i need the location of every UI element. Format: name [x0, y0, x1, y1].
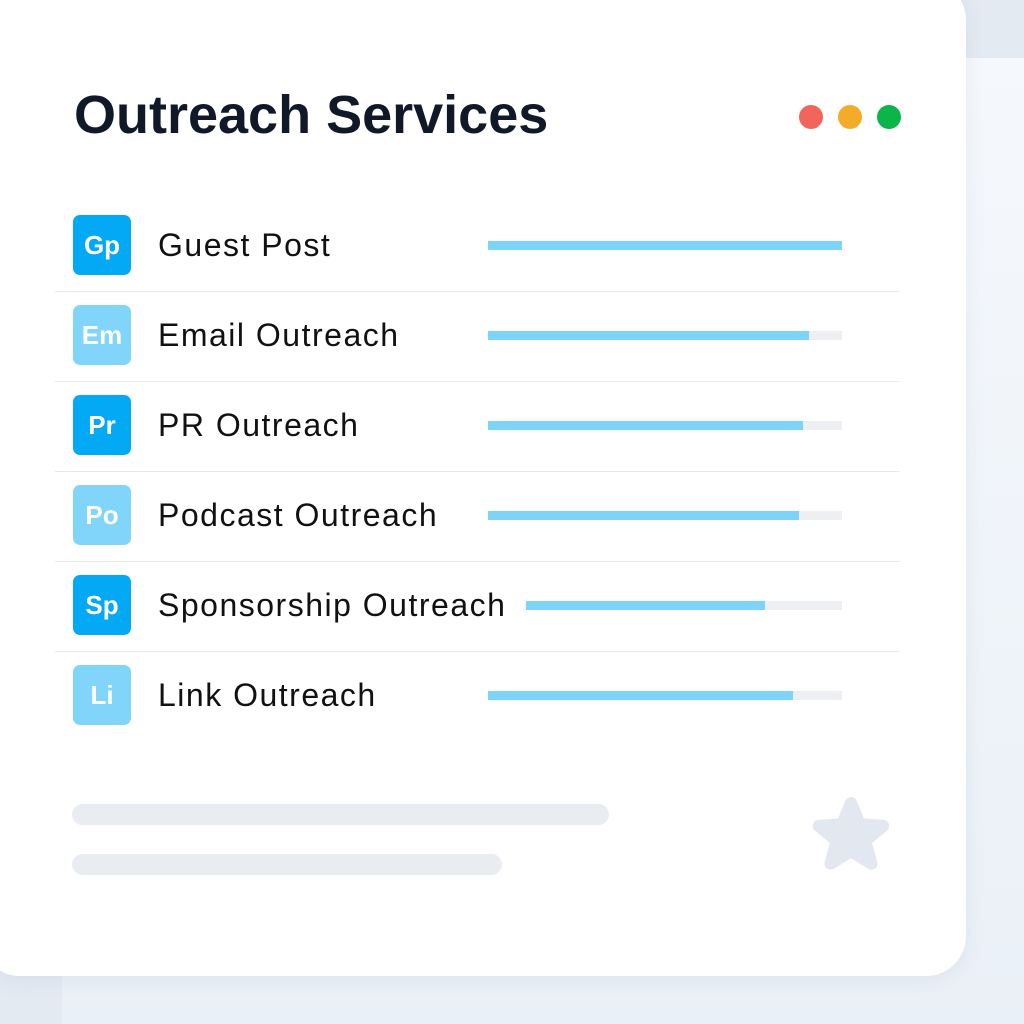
row: Sponsorship Outreach [55, 575, 900, 652]
row: Guest Post: Gp [84, 230, 120, 260]
placeholder bar 2 [72, 854, 502, 875]
row: PR Outreach [55, 395, 900, 472]
row: Link Outreach [73, 665, 842, 725]
row: Email Outreach: Em [82, 320, 122, 350]
row: Link Outreach: Link Outreach [158, 677, 377, 713]
row: Podcast Outreach [55, 485, 900, 562]
row: Sponsorship Outreach: Sponsorship Outreach [158, 587, 506, 623]
row: Link Outreach: Li [90, 680, 114, 710]
row: Guest Post [55, 215, 900, 292]
row: Podcast Outreach: Po [85, 500, 119, 530]
row: Email Outreach: Email Outreach [158, 317, 400, 353]
row: PR Outreach: Pr [88, 410, 116, 440]
window dots [799, 105, 901, 129]
row: Email Outreach [55, 305, 900, 382]
placeholder bar 1 [72, 804, 609, 825]
row: Sponsorship Outreach: Sp [85, 590, 119, 620]
row: PR Outreach: PR Outreach [158, 407, 359, 443]
row: Podcast Outreach: Podcast Outreach [158, 497, 438, 533]
row: Guest Post: Guest Post [158, 227, 331, 263]
icon: star [812, 797, 890, 870]
title: Outreach Services [74, 85, 548, 145]
